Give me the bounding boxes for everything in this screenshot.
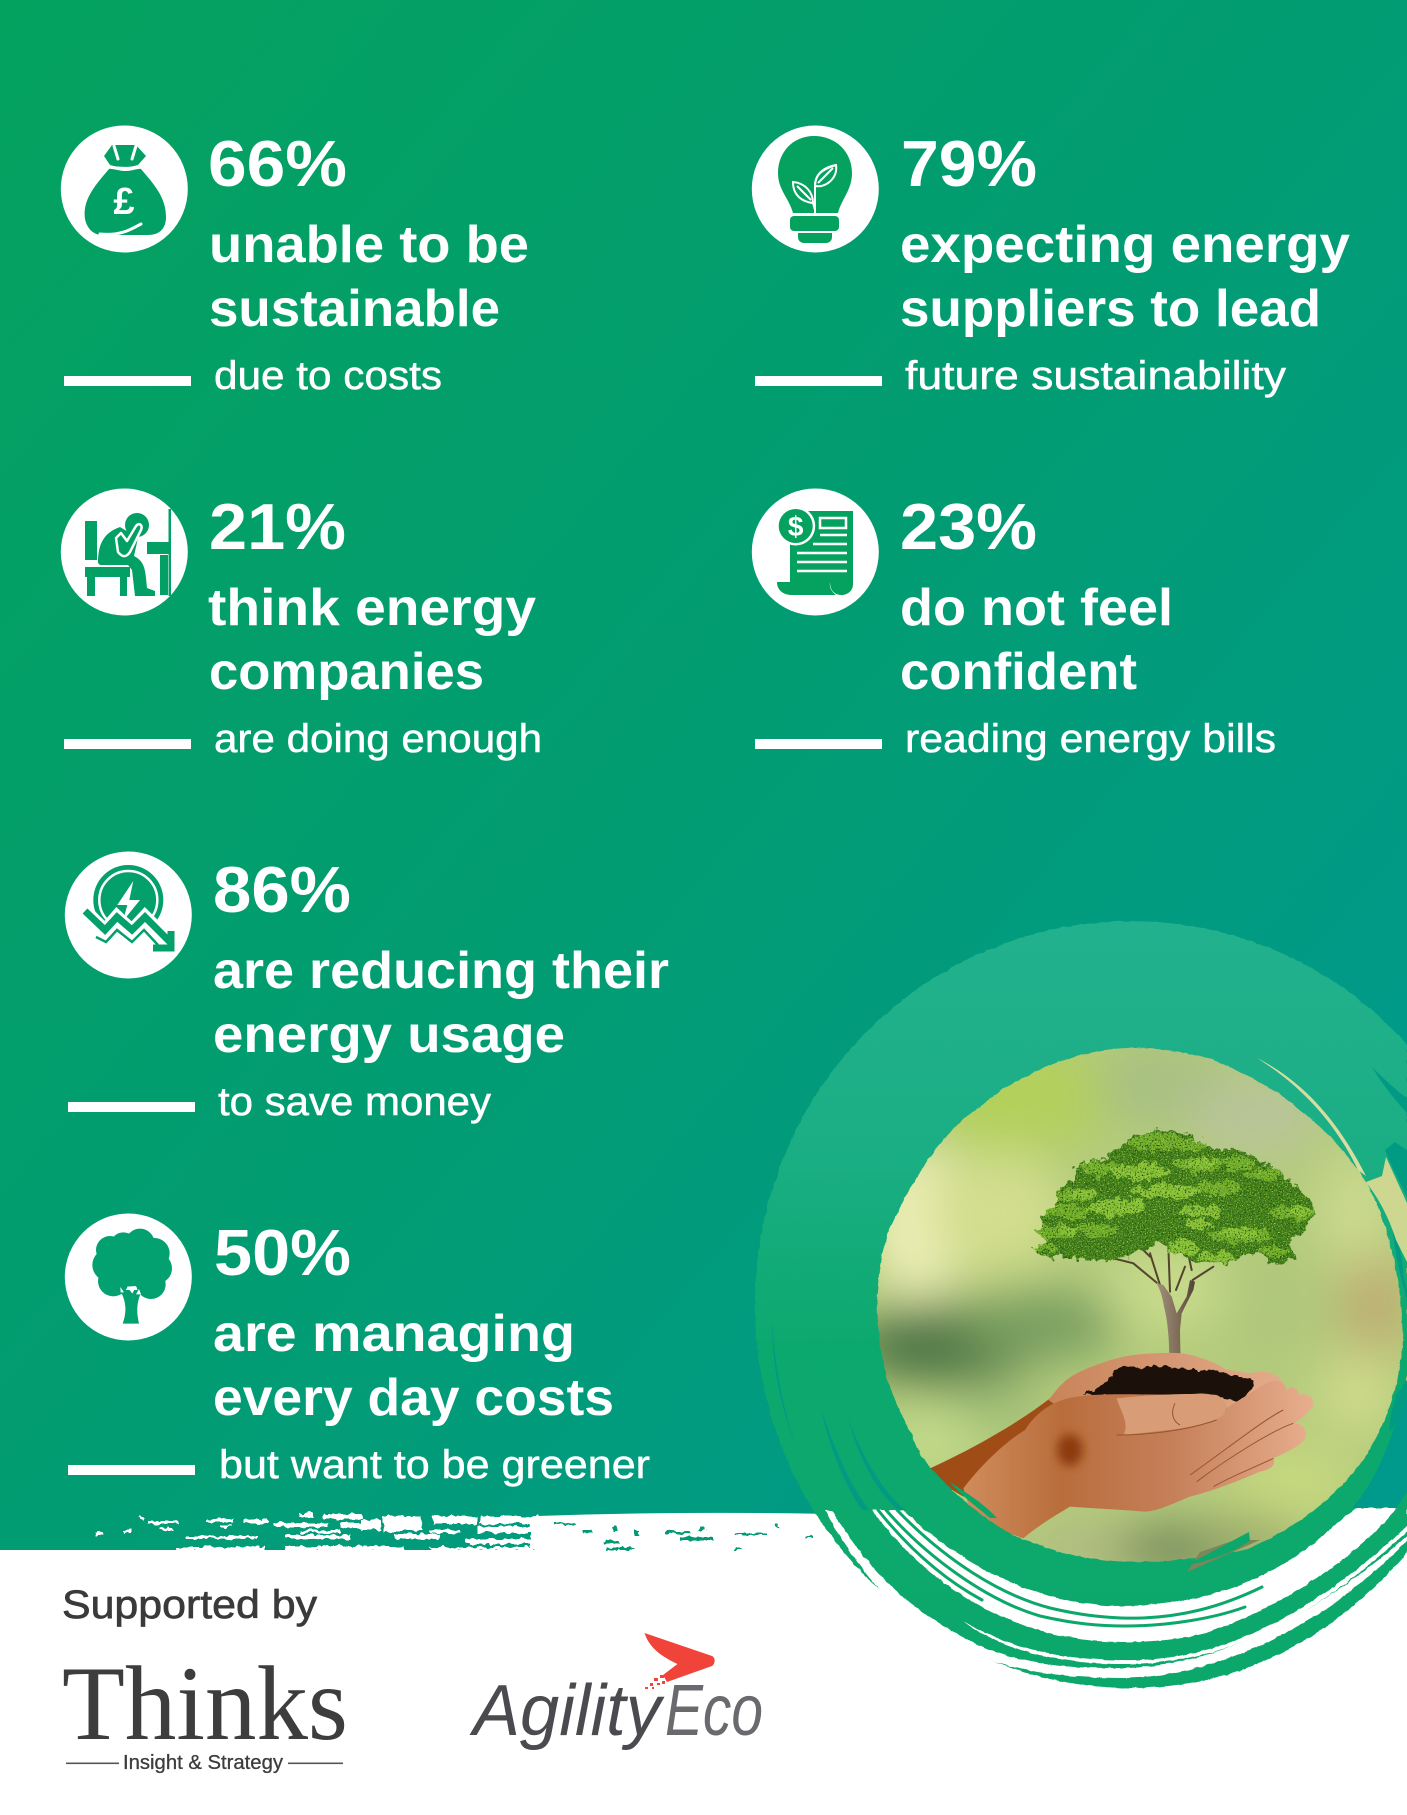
ring: green strand over the hand (950, 1482, 997, 1518)
brush streaks on footer edge (96, 1513, 540, 1551)
stat headline line 1: do not feel (900, 579, 1173, 637)
stat: 50% are managing every day costs (65, 1214, 650, 1487)
stat: 23% do not feel confident reading energy bills (752, 488, 1276, 761)
stat: 21% think energy companies are doing enough (61, 488, 542, 761)
stat note: but want to be greener (219, 1443, 650, 1487)
ring: white stripes at bottom (825, 1508, 1407, 1678)
stat headline line 1: unable to be (209, 216, 529, 274)
stat headline line 2: companies (209, 643, 484, 701)
ring: dry-brush slits (772, 1067, 1407, 1510)
branches (1112, 1248, 1214, 1293)
white footer with brush edge (0, 1508, 1407, 1815)
ring: background wedge at lower right (1352, 1385, 1407, 1508)
logo: AgilityEco: Agility (469, 1671, 665, 1751)
arm behind (930, 1398, 1054, 1497)
stat: 66% unable to be sustainable (61, 126, 529, 398)
stat: 86% are reducing their energy usage (65, 852, 669, 1124)
divider line (755, 376, 882, 386)
icon: bill document with dollar (752, 488, 879, 616)
stat headline line 2: sustainable (209, 280, 500, 338)
photo blurred background (876, 1048, 1407, 1562)
foliage (1033, 1131, 1317, 1265)
ring: pale strand top right (1257, 1058, 1366, 1176)
photo: tree in cupped hands (876, 1048, 1407, 1562)
trunk (1157, 1280, 1195, 1354)
soil (1083, 1366, 1254, 1402)
stat value: 50% (214, 1216, 351, 1289)
stat headline line 1: expecting energy (900, 216, 1350, 274)
stat headline line 2: every day costs (213, 1369, 614, 1427)
logo: Thinks Insight & Strategy: Thinks (62, 1645, 348, 1762)
icon: person sitting at desk with tick (61, 488, 188, 616)
stat note: to save money (218, 1080, 491, 1124)
logo: Thinks Insight & Strategy: Insight & Strategy (123, 1752, 283, 1774)
stat value: 79% (901, 127, 1037, 200)
stat value: 23% (900, 490, 1037, 563)
knuckle shading (1057, 1434, 1083, 1466)
stat headline line 2: suppliers to lead (900, 280, 1321, 338)
logo: AgilityEco (469, 1633, 763, 1751)
ring: olive sliver and green strand bottom right of photo (1187, 1532, 1260, 1572)
brush specks cut into the footer edge (554, 1523, 812, 1550)
ring: green strands inside the white stripes (878, 1510, 1262, 1626)
divider line (64, 739, 191, 749)
hands and soil (930, 1353, 1314, 1538)
stat headline line 1: think energy (208, 579, 536, 637)
brush ring around photo (755, 921, 1407, 1688)
stat value: 66% (208, 127, 347, 200)
stat note: are doing enough (214, 717, 542, 761)
supported by heading: Supported by (62, 1583, 317, 1627)
thumb (1117, 1394, 1225, 1435)
hand creases (1117, 1403, 1293, 1487)
ring: photo showing through at top right (1366, 1157, 1407, 1262)
logo: AgilityEco: Eco (665, 1671, 763, 1751)
stat headline line 1: are reducing their (213, 942, 669, 1000)
stat value: 21% (209, 490, 346, 563)
stat headline line 2: energy usage (213, 1006, 565, 1064)
divider line (64, 376, 191, 386)
back hand (1048, 1353, 1283, 1410)
icon: money bag (61, 126, 188, 252)
icon: tree (65, 1214, 192, 1340)
red chevron mark (644, 1633, 715, 1689)
stat value: 86% (213, 853, 351, 926)
divider line (68, 1465, 195, 1475)
stat note: future sustainability (905, 354, 1286, 398)
tree crown and trunk (1033, 1131, 1317, 1371)
icon: money bag: £ (113, 181, 135, 223)
divider line (755, 739, 882, 749)
stat note: due to costs (214, 354, 442, 398)
divider line (68, 1102, 195, 1112)
icon: bill document with dollar: $ (788, 511, 804, 542)
stat headline line 2: confident (900, 643, 1137, 701)
icon: energy bolt with falling arrow (65, 852, 192, 978)
stat note: reading energy bills (905, 717, 1276, 761)
front hand (963, 1381, 1314, 1538)
stat: 79% expecting energy suppliers to lead (752, 126, 1350, 398)
stat headline line 1: are managing (213, 1305, 575, 1363)
icon: light bulb with plant (752, 126, 879, 252)
